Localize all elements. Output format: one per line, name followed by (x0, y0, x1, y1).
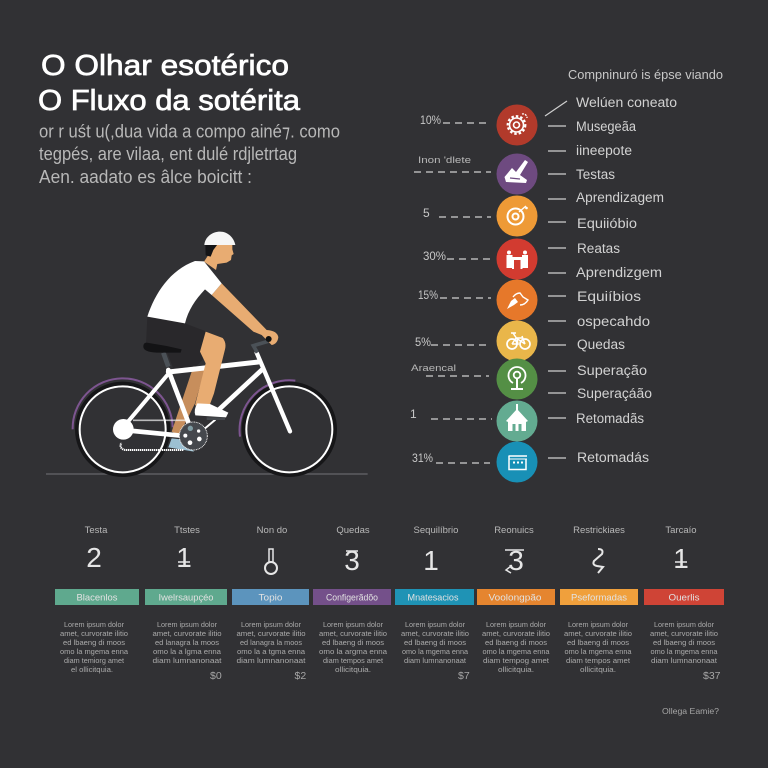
column 8: Tarcaío: $37 (703, 670, 721, 682)
rear wheel (77, 384, 168, 475)
column 7: Restrickiaes: amet, curvorate ilitio (564, 629, 632, 638)
column 3: Non do (232, 525, 309, 682)
column 2: Ttstes: ed lanagra la moos (155, 638, 219, 647)
column 5: Sequilíbrio (395, 525, 474, 682)
column 8: Tarcaío: omo la mgema enna (650, 647, 718, 656)
column 4: Quedas: omo la argma enna (319, 647, 388, 656)
hair (205, 245, 217, 257)
column 5: Sequilíbrio: Sequilíbrio (414, 525, 458, 536)
icon: two people on red circle (496, 238, 538, 280)
column 1: Testa: Testa (85, 525, 108, 536)
column 2: Ttstes: $0 (210, 670, 222, 682)
timeline: left labels and dashed leaders: 15% (418, 288, 438, 302)
column 6: Reonuics: ollicitquia. (498, 665, 534, 674)
timeline: left labels and dashed leaders (410, 113, 492, 465)
column 4: Quedas: 3 (344, 545, 360, 576)
timeline: right labels: Aprendizgem (576, 265, 662, 280)
timeline: left labels and dashed leaders: Araencal (411, 363, 456, 374)
bicycle frame (121, 353, 290, 450)
timeline: left labels and dashed leaders: 5% (415, 335, 431, 349)
column 7: Restrickiaes: ollicitquia. (580, 665, 616, 674)
rear hub (113, 419, 134, 440)
column 5: Sequilíbrio: ed lbaeng di moos (404, 638, 466, 647)
column 7: Restrickiaes: Pseformadas (571, 592, 627, 604)
column 6: Reonuics: 3 (508, 545, 524, 576)
timeline: right connector lines (545, 101, 567, 458)
column 1: Testa: Lorem ipsum dolor (64, 620, 125, 629)
column 2: Ttstes: amet, curvorate ilitio (152, 629, 222, 638)
column 6: Reonuics: amet, curvorate ilitio (482, 629, 550, 638)
column 5: Sequilíbrio: $7 (458, 670, 470, 682)
column 4: Quedas: Configerãdõo (326, 592, 378, 604)
column 4: Quedas: diam tempos amet (323, 656, 383, 665)
column 2: Ttstes: Iwelrsaupçéo (158, 592, 214, 604)
column 8: Tarcaío (644, 525, 724, 682)
column 8: Tarcaío: Ouerlis (668, 592, 700, 604)
timeline: left labels and dashed leaders: 30% (423, 249, 446, 263)
column 5: Sequilíbrio: diam lumnanonaat (404, 656, 466, 665)
hand grip (266, 336, 272, 342)
timeline: left labels and dashed leaders: Inon 'dlete (418, 155, 471, 166)
column 7: Restrickiaes: ed lbaeng di moos (567, 638, 629, 647)
fenders (73, 378, 295, 437)
shorts (146, 317, 208, 369)
timeline: left labels and dashed leaders: 5 (423, 206, 430, 220)
column 6: Reonuics: Voolongpão (488, 592, 542, 604)
front wheel (244, 384, 335, 475)
timeline: left labels and dashed leaders: 1 (410, 407, 417, 421)
timeline: right labels: Quedas (577, 337, 625, 352)
column 4: Quedas: ollicitquia. (335, 665, 371, 674)
icon: window on blue circle (496, 442, 538, 482)
neck and head (204, 244, 234, 270)
column 5: Sequilíbrio: Mnatesacios (408, 592, 459, 604)
footer note: Ollega Eamie? (662, 706, 719, 716)
icon: target on orange circle (496, 196, 538, 236)
column 7: Restrickiaes: omo la mgema enna (564, 647, 632, 656)
timeline: right labels: Musegeãa (576, 119, 636, 134)
front leg (195, 332, 225, 406)
arm (212, 283, 278, 345)
column 7: Restrickiaes (560, 525, 638, 674)
column 4: Quedas: Lorem ipsum dolor (323, 620, 384, 629)
intro text (39, 122, 340, 187)
column 2: Ttstes: Lorem ipsum dolor (157, 620, 218, 629)
saddle (143, 343, 182, 353)
column 5: Sequilíbrio: omo la mgema enna (402, 647, 469, 656)
timeline: right labels (576, 95, 677, 465)
timeline: right labels: Testas (576, 167, 615, 182)
timeline: right labels: Welúen coneato (576, 95, 677, 110)
column 7: Restrickiaes: diam tempos amet (566, 656, 630, 665)
column 2: Ttstes: omo la a lgma enna (153, 647, 222, 656)
column 2: Ttstes: diam lumnanonaat (152, 656, 222, 665)
title: O Fluxo da sotérita (38, 85, 301, 117)
column 8: Tarcaío: ed lbaeng di moos (653, 638, 715, 647)
rear leg (172, 367, 206, 435)
column 4: Quedas: amet, curvorate ilitio (319, 629, 387, 638)
title: O Olhar esotérico (41, 50, 289, 82)
title (38, 50, 301, 117)
column 4: Quedas (313, 525, 391, 674)
timeline: right labels: Retomadás (577, 450, 649, 465)
intro text: tegpés, are vilaa, ent dulé rdjletrtag (39, 144, 297, 164)
column 3: Non do: ed lanagra la moos (240, 638, 302, 647)
timeline: right labels: Equiíbios (577, 289, 641, 304)
intro text: or r uśt u(,dua vida a compo ainé⁊. como (39, 122, 340, 142)
timeline: right labels: Aprendizagem (576, 190, 664, 205)
column 8: Tarcaío: diam lumnanonaat (651, 656, 717, 665)
column 1: Testa: 2 (86, 542, 102, 573)
icon: antenna on green circle (496, 358, 538, 400)
column 8: Tarcaío: Tarcaío (665, 525, 697, 536)
column 7: Restrickiaes: Restrickiaes (573, 525, 625, 536)
timeline: right labels: iineepote (576, 143, 632, 158)
helmet (204, 232, 235, 245)
column 3: Non do: $2 (294, 670, 306, 682)
icon: brush on orange circle (496, 280, 538, 320)
column 5: Sequilíbrio: Lorem ipsum dolor (405, 620, 466, 629)
column 1: Testa: diam temiorg amet (64, 656, 124, 665)
timeline: right labels: ospecahdo (577, 314, 650, 329)
ground line (46, 472, 368, 476)
column 1: Testa (55, 525, 139, 674)
timeline: right labels: Reatas (577, 241, 620, 256)
column 1: Testa: omo la mgema enna (60, 647, 129, 656)
handlebar stem (253, 341, 268, 353)
rear shoe (168, 438, 194, 452)
column 8: Tarcaío: 1 (673, 543, 689, 574)
illustration: cyclist on bicycle (46, 232, 368, 475)
column 3: Non do: Lorem ipsum dolor (241, 620, 302, 629)
timeline: right labels: Superação (577, 363, 647, 378)
timeline: right labels: Superaçáão (577, 386, 652, 401)
intro text: Aen. aadato es âlce boicitt : (39, 167, 252, 187)
column 3: Non do: Topio (258, 592, 282, 604)
column 6: Reonuics: diam tempog amet (483, 656, 549, 665)
front shoe (195, 403, 228, 417)
column 8: Tarcaío: Lorem ipsum dolor (654, 620, 715, 629)
icon: bicycle on yellow circle (496, 320, 538, 362)
column 1: Testa: amet, curvorate ilitio (60, 629, 128, 638)
timeline: left labels and dashed leaders: 31% (412, 451, 433, 465)
column 3: Non do: diam lumnanonaat (236, 656, 306, 665)
column 5: Sequilíbrio: 1 (423, 545, 439, 576)
timeline: left labels and dashed leaders: 10% (420, 113, 441, 127)
icon: gear on red circle (496, 104, 538, 146)
column 1: Testa: ed lbaeng di moos (63, 638, 125, 647)
timeline: right labels: Retomadãs (576, 411, 644, 426)
column 1: Testa: Blacenlos (76, 592, 118, 604)
column 6: Reonuics: Lorem ipsum dolor (486, 620, 547, 629)
column 6: Reonuics (477, 525, 555, 674)
icon: tool on purple circle (496, 154, 538, 194)
shirt (147, 261, 222, 323)
column 3: Non do: amet, curvorate ilitio (236, 629, 306, 638)
column 6: Reonuics: omo la mgema enna (482, 647, 550, 656)
pedal (207, 417, 225, 420)
column 2: Ttstes: Ttstes (174, 525, 200, 536)
column 8: Tarcaío: amet, curvorate ilitio (650, 629, 718, 638)
seat post (163, 353, 168, 367)
column 6: Reonuics: ed lbaeng di moos (485, 638, 547, 647)
column 2: Ttstes: 1 (176, 542, 192, 573)
column 4: Quedas: ed lbaeng di moos (322, 638, 384, 647)
chainring (179, 422, 207, 450)
column 7: Restrickiaes: Lorem ipsum dolor (568, 620, 629, 629)
timeline: right labels: Equiióbio (577, 216, 637, 231)
column 3: Non do: omo la a tgma enna (237, 647, 306, 656)
column 3: Non do: Non do (257, 525, 287, 536)
column 4: Quedas: Quedas (336, 525, 370, 536)
icon: house on teal circle (496, 400, 538, 442)
column 1: Testa: el ollicitquia. (71, 665, 113, 674)
right column heading: Compninuró is épse viando (568, 67, 723, 82)
column 6: Reonuics: Reonuics (494, 525, 534, 536)
column 5: Sequilíbrio: amet, curvorate ilitio (401, 629, 469, 638)
column 2: Ttstes (145, 525, 227, 682)
